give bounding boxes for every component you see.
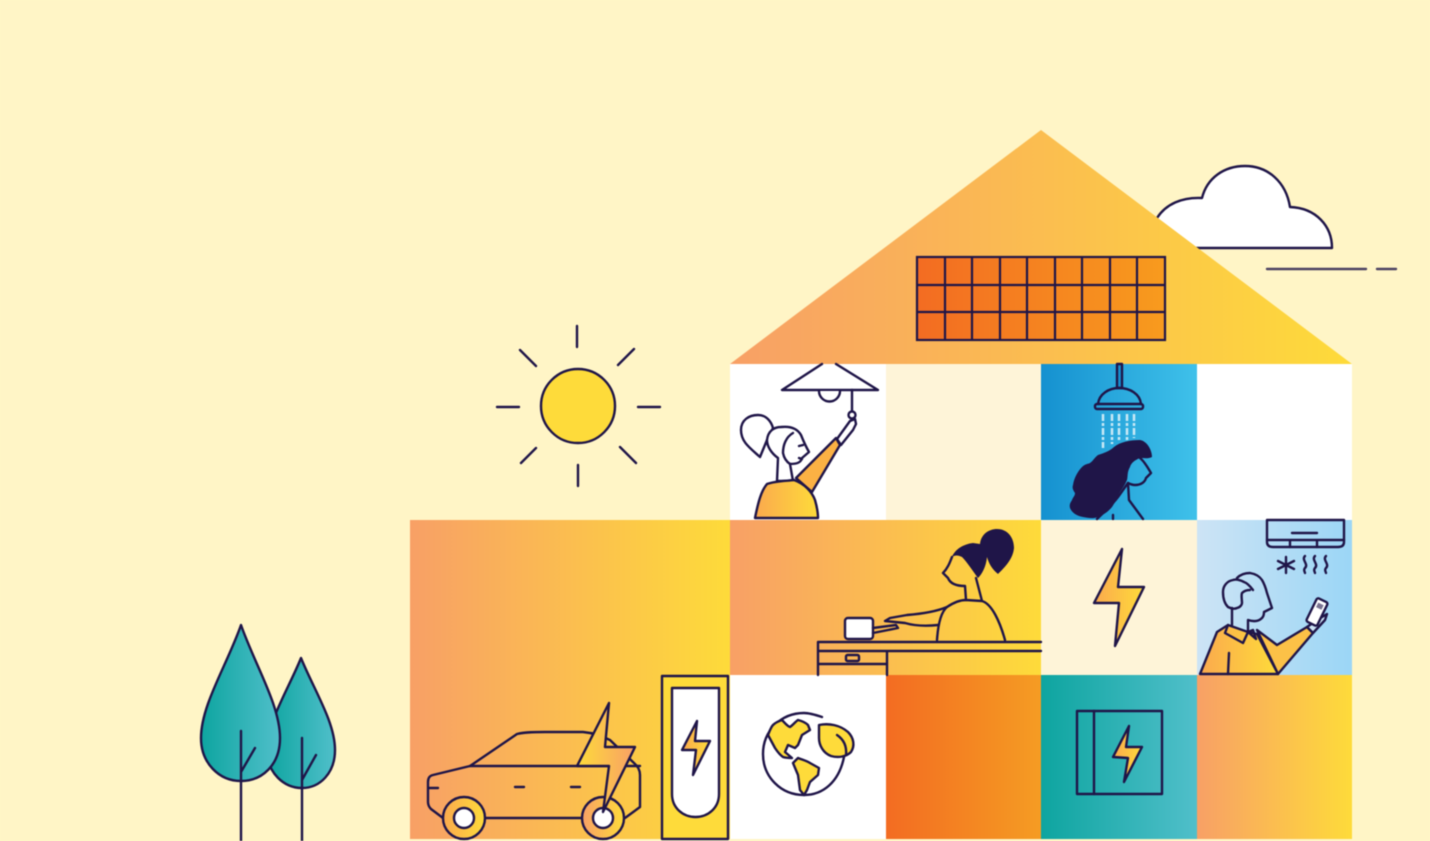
house cell grid [410,364,1352,839]
scene: man with air conditioner remote [1200,520,1344,674]
roof [730,130,1352,364]
solar panel [917,257,1165,340]
icon: trees [201,625,335,841]
icon: sun [497,326,660,486]
icon: electric car [428,703,640,839]
icon: cloud [1150,166,1332,248]
icon: lightning bolt [1094,549,1144,646]
wind lines [1267,268,1396,270]
scene: woman cooking at counter [818,529,1041,675]
icon: globe with leaf [763,713,853,795]
icon: charging station [662,676,728,839]
scene: woman in shower [1070,364,1152,519]
scene: woman pulling lamp cord [741,364,878,518]
icon: home battery [1077,711,1162,794]
